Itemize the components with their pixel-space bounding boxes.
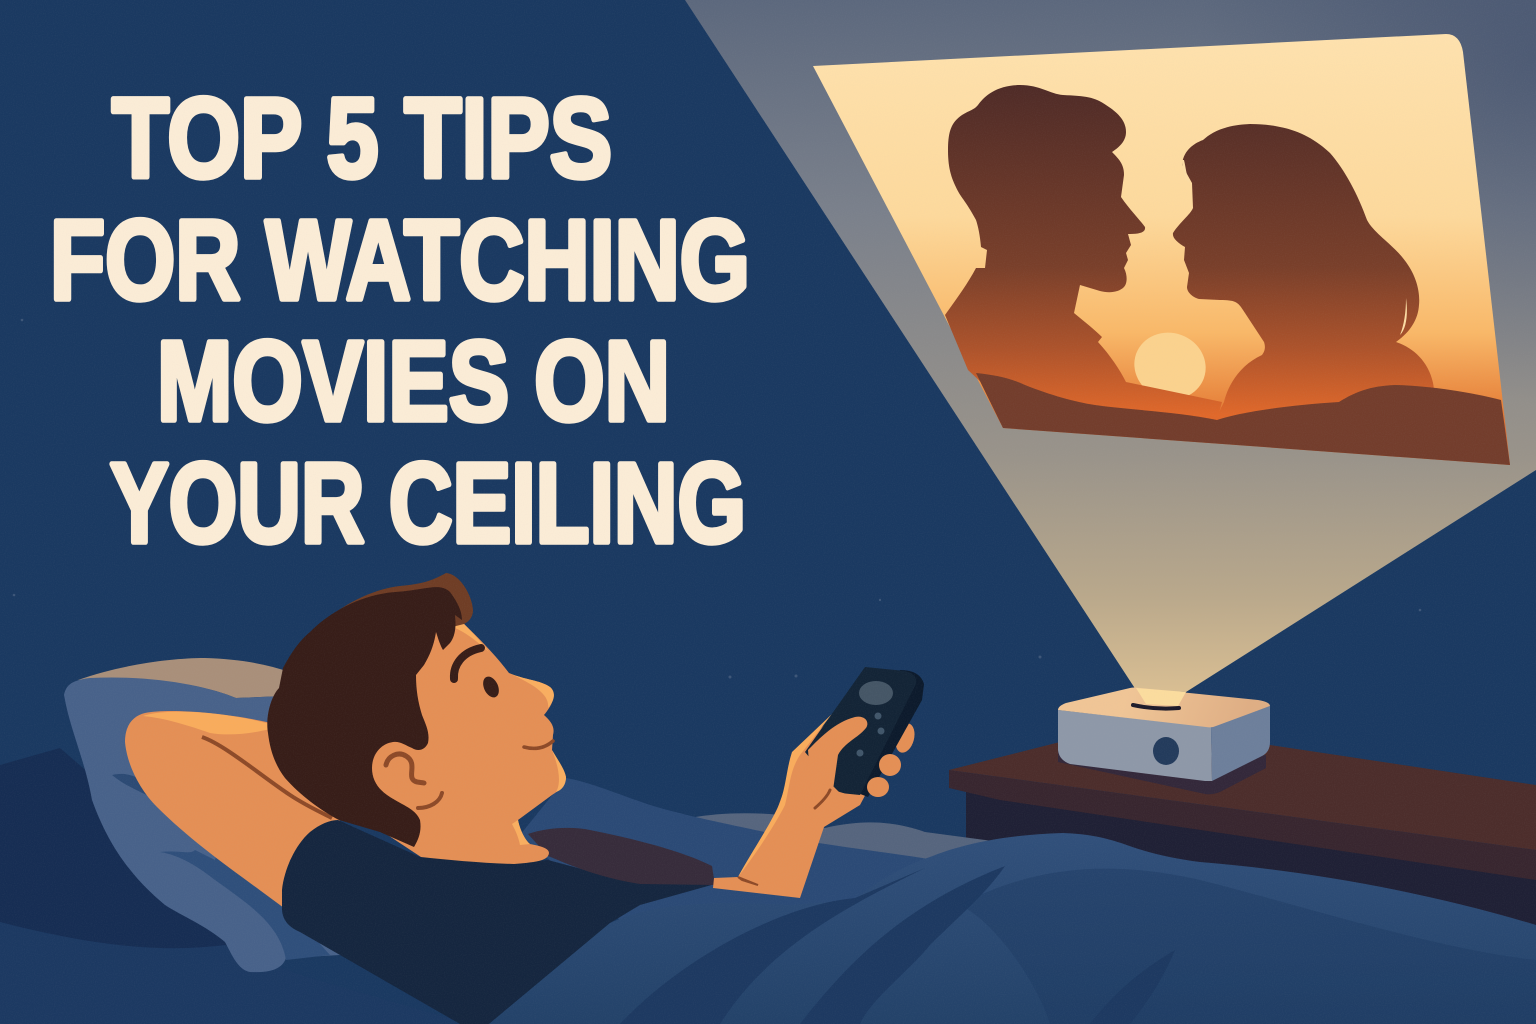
projector light beam	[685, 0, 1536, 692]
remote small buttons	[856, 712, 884, 756]
pillow right shadow	[160, 800, 330, 960]
blanket	[489, 833, 1536, 1024]
woman hair highlights	[1182, 160, 1407, 335]
dark shirt fold	[528, 828, 715, 885]
title line 2: FOR WATCHING	[50, 197, 750, 323]
blue sheet	[520, 778, 945, 920]
smile	[524, 741, 553, 748]
pillow back lit edge	[78, 658, 290, 698]
man silhouette	[945, 85, 1222, 420]
setting sun	[1125, 323, 1215, 409]
hand holding remote	[713, 667, 924, 898]
remote body	[805, 667, 916, 795]
nightstand top	[949, 742, 1536, 850]
projector side face	[1211, 706, 1270, 781]
remote large button	[859, 681, 893, 705]
hair	[267, 587, 462, 847]
projector shadow	[1058, 750, 1266, 794]
jaw line	[418, 793, 442, 808]
palm crease	[815, 790, 830, 808]
pillow	[64, 658, 420, 972]
projected movie screen	[813, 34, 1510, 465]
projector top	[1058, 688, 1270, 727]
woman silhouette	[1173, 124, 1440, 420]
title line 4: YOUR CEILING	[110, 440, 746, 566]
projector	[1058, 688, 1270, 794]
person	[125, 573, 715, 1024]
wrist crease	[738, 877, 758, 885]
stars	[13, 319, 1421, 678]
hair back tuft	[303, 573, 473, 640]
pillow front	[64, 677, 420, 972]
lower bedding	[0, 922, 470, 1024]
eyebrow	[454, 648, 481, 679]
lens	[1153, 737, 1179, 765]
title line 1: TOP 5 TIPS	[112, 75, 612, 201]
title line 3: MOVIES ON	[157, 318, 670, 444]
shirt	[282, 820, 715, 1024]
thumb	[808, 717, 867, 810]
index finger	[892, 721, 918, 755]
face highlights	[455, 615, 566, 845]
beam cone	[685, 0, 1536, 692]
nightstand body	[966, 790, 1536, 940]
ear inner	[386, 754, 424, 783]
top slot	[1133, 705, 1179, 709]
lamp glow	[1136, 688, 1186, 706]
hand highlight	[738, 714, 832, 877]
blanket folds	[620, 866, 1536, 1024]
beam shading on the right	[685, 0, 1536, 692]
neck and face	[340, 615, 566, 864]
back sheets	[0, 748, 1000, 1024]
eye	[480, 674, 502, 700]
nightstand	[949, 742, 1536, 940]
pillow crease	[112, 774, 180, 810]
fingers	[867, 754, 901, 797]
nightstand lip	[949, 770, 1536, 880]
remote side	[850, 670, 924, 797]
foreground hills	[976, 373, 1510, 465]
ear	[371, 742, 442, 809]
arm highlight	[143, 712, 270, 734]
screen surface	[813, 34, 1510, 465]
dark mattress	[0, 748, 330, 1024]
main blanket	[489, 833, 1536, 1024]
grey lit sheet	[690, 813, 1000, 865]
arm crease	[202, 737, 332, 818]
arm behind head	[125, 711, 340, 908]
projector front face	[1058, 710, 1212, 781]
title	[50, 75, 750, 566]
forearm and palm	[713, 715, 868, 898]
